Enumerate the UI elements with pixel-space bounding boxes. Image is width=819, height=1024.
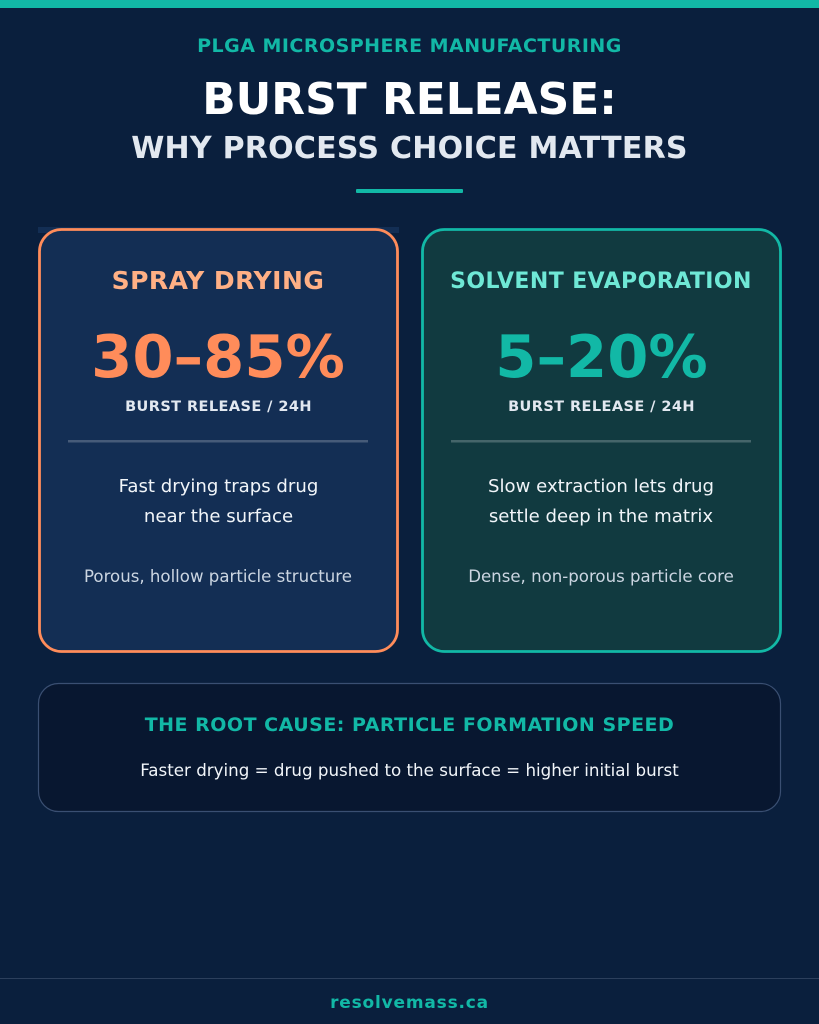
spray drying structure note: Porous, hollow particle structure <box>84 567 352 586</box>
solvent evaporation heading: SOLVENT EVAPORATION <box>450 269 752 294</box>
root cause explanation: Faster drying = drug pushed to the surface = higher initial burst <box>140 760 679 780</box>
spray drying metric label: BURST RELEASE / 24H <box>125 399 312 415</box>
spray drying percentage: 30–85% <box>91 322 345 391</box>
root cause heading: THE ROOT CAUSE: PARTICLE FORMATION SPEED <box>145 714 674 736</box>
solvent evaporation metric label: BURST RELEASE / 24H <box>508 399 695 415</box>
title divider <box>356 189 463 193</box>
solvent evaporation structure note: Dense, non-porous particle core <box>468 567 734 586</box>
top accent bar <box>0 0 819 8</box>
subtitle: WHY PROCESS CHOICE MATTERS <box>131 131 688 166</box>
panel: spray drying <box>38 227 399 652</box>
solvent evaporation percentage: 5–20% <box>495 322 708 391</box>
solvent evaporation description: Slow extraction lets drug <box>488 476 714 497</box>
spray drying heading: SPRAY DRYING <box>112 266 324 295</box>
eyebrow heading: PLGA MICROSPHERE MANUFACTURING <box>197 35 622 57</box>
panel: root cause <box>38 684 780 812</box>
spray drying description: near the surface <box>144 506 293 527</box>
solvent evaporation description: settle deep in the matrix <box>489 506 713 527</box>
title: BURST RELEASE: <box>202 74 617 125</box>
panel: solvent evaporation <box>422 230 780 652</box>
spray drying description: Fast drying traps drug <box>119 476 318 497</box>
footer website: resolvemass.ca <box>330 993 489 1013</box>
